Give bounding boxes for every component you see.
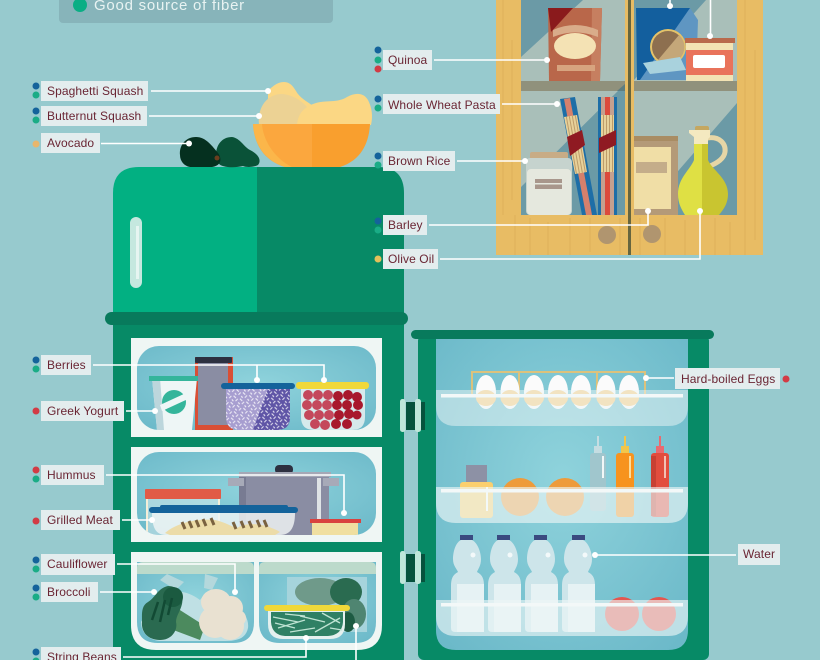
tomatoes [605, 597, 676, 631]
label: Brown Rice [374, 151, 528, 171]
hummus tub [310, 519, 361, 535]
blue bag of grains [636, 8, 698, 80]
grilled meat container [149, 505, 298, 535]
label: Grilled Meat: Grilled Meat [47, 513, 113, 527]
jar of brown rice [526, 152, 572, 215]
cabinet knobs [598, 225, 661, 244]
label: Brown Rice: Brown Rice [388, 154, 451, 168]
crisper drawers [131, 552, 382, 650]
fridge freezer top [113, 167, 404, 320]
fridge main body [105, 312, 408, 660]
red lid container [145, 489, 221, 535]
top fridge shelf [131, 338, 382, 437]
label: Spaghetti Squash: Spaghetti Squash [47, 84, 143, 98]
olive oil jug [678, 126, 728, 215]
raspberries container [296, 382, 369, 430]
avocados [180, 137, 260, 167]
label: Greek Yogurt [32, 401, 158, 421]
butternut squash [259, 94, 311, 125]
label: Grilled Meat [32, 510, 155, 530]
quinoa bag [548, 8, 602, 81]
middle fridge shelf [131, 447, 382, 542]
left drawer [137, 562, 254, 643]
label: Whole Wheat Pasta [374, 94, 560, 114]
label: Hard-boiled Eggs: Hard-boiled Eggs [681, 372, 775, 386]
red box [195, 357, 233, 430]
label: Hummus: Hummus [47, 468, 96, 482]
spaghetti squash [268, 82, 313, 120]
bottle 3 [525, 535, 558, 632]
fridge door [411, 330, 714, 660]
bag tie [160, 574, 218, 590]
label: Butternut Squash [32, 106, 262, 126]
can [685, 38, 735, 81]
label: String Beans [32, 635, 309, 660]
oranges [501, 478, 584, 516]
egg shelf [436, 390, 688, 426]
string beans container [264, 605, 350, 639]
label: Barley [374, 208, 651, 235]
whole wheat pasta [560, 97, 617, 215]
label: Hummus [32, 465, 347, 516]
label: Whole Wheat Pasta: Whole Wheat Pasta [388, 98, 496, 112]
blueberries container [221, 383, 295, 430]
egg tray [472, 372, 645, 409]
label: Cauliflower: Cauliflower [47, 557, 107, 571]
legend panel [59, 0, 333, 23]
lower hinge [400, 551, 425, 584]
label: Spaghetti Squash [32, 81, 271, 101]
label: Olive Oil: Olive Oil [388, 252, 434, 266]
condiment shelf [436, 487, 688, 523]
ketchup bottle [651, 436, 669, 517]
bowl of squash [253, 82, 372, 167]
water shelf [436, 600, 688, 636]
pointer: spinach [353, 623, 359, 660]
label: Broccoli [32, 582, 157, 602]
label: Quinoa [374, 46, 550, 72]
bottle 1 [451, 535, 484, 632]
right drawer [259, 562, 376, 643]
upper hinge [400, 399, 425, 432]
clear bottle [590, 436, 606, 511]
lines for pantry items above [667, 0, 713, 39]
bottle 2 [488, 535, 521, 632]
spinach [295, 578, 366, 632]
jar [460, 465, 493, 518]
label: Quinoa: Quinoa [388, 53, 428, 67]
label: Berries [32, 355, 327, 383]
label: Barley: Barley [388, 218, 423, 232]
broccoli [142, 586, 205, 640]
barley box [634, 136, 678, 215]
pot [228, 465, 339, 535]
mustard bottle [616, 436, 634, 517]
bowl [253, 124, 312, 167]
label: Avocado [32, 133, 192, 153]
greek yogurt [149, 376, 198, 430]
label: Avocado: Avocado [47, 136, 94, 150]
label: Water: Water [743, 547, 775, 561]
label: Olive Oil [374, 208, 703, 269]
label: Hard-boiled Eggs [643, 368, 790, 389]
cauliflower [199, 589, 246, 640]
label: Berries: Berries [47, 358, 86, 372]
label: Butternut Squash: Butternut Squash [47, 109, 141, 123]
water bottles [451, 535, 595, 632]
condiment shelf items [460, 436, 669, 518]
label: Water [592, 544, 780, 565]
label: Cauliflower [32, 554, 238, 595]
label: Broccoli: Broccoli [47, 585, 90, 599]
bottle 4 [562, 535, 595, 632]
pantry cabinet [496, 0, 763, 255]
label: Greek Yogurt: Greek Yogurt [47, 404, 119, 418]
